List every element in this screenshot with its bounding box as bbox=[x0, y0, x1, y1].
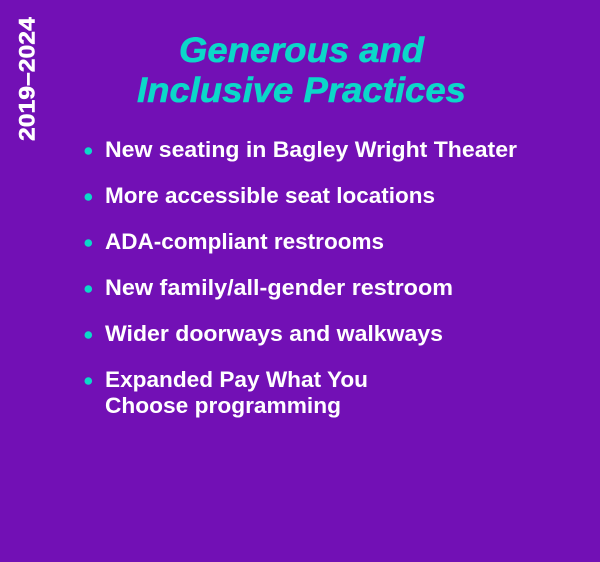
title: Inclusive Practices bbox=[137, 71, 466, 110]
list item: Pay What You Choose: Expanded Pay What You bbox=[105, 367, 368, 392]
list item: Pay What You Choose bbox=[84, 367, 368, 418]
title bbox=[137, 31, 466, 110]
list item: seating: New seating in Bagley Wright Theater bbox=[105, 137, 517, 162]
list item: ADA restrooms: ADA-compliant restrooms bbox=[105, 229, 384, 254]
date range label: 2019–2024 bbox=[15, 16, 40, 141]
bullet list bbox=[84, 137, 517, 418]
list item: family restroom: New family/all-gender restroom bbox=[105, 275, 453, 300]
title: Generous and bbox=[179, 31, 425, 70]
list item: doorways: Wider doorways and walkways bbox=[105, 321, 443, 346]
list item: seat locations: More accessible seat locations bbox=[105, 183, 435, 208]
list item: Pay What You Choose: Choose programming bbox=[105, 393, 341, 418]
